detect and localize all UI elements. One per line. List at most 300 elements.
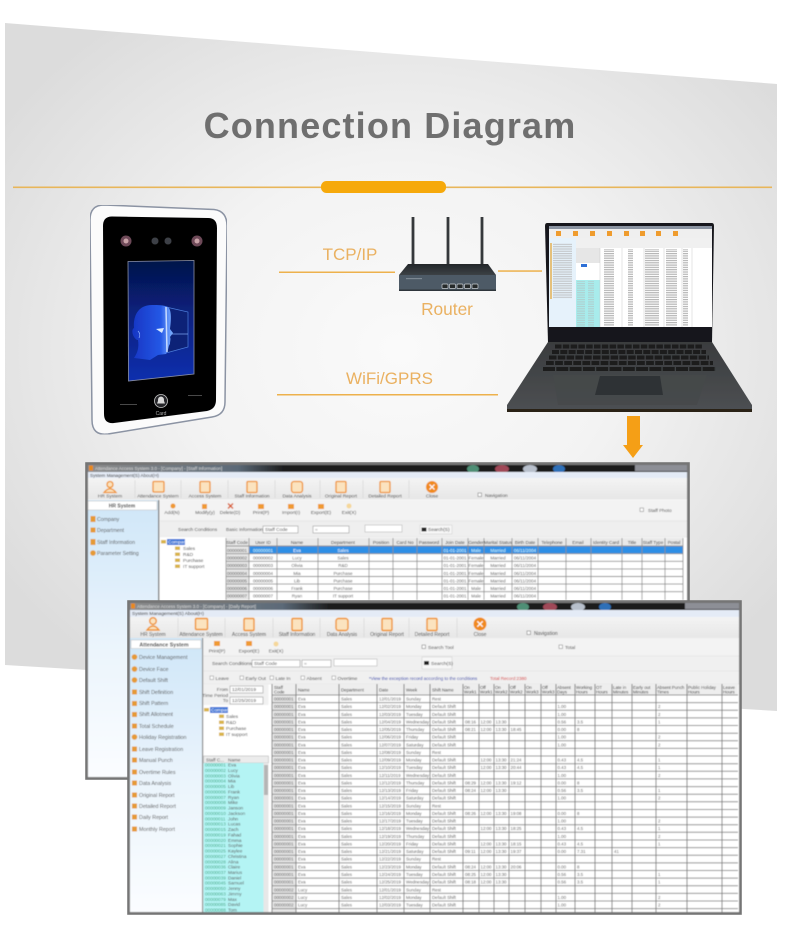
attendance table rows: 1	[658, 842, 661, 846]
attendance table rows: Sales	[341, 880, 353, 885]
attendance table rows: 0.43	[558, 765, 567, 770]
attendance table header: Code	[274, 690, 285, 694]
search conditions row: Search Conditions	[178, 527, 218, 533]
staff list: John	[228, 816, 239, 821]
attendance table rows: 0.00	[558, 849, 567, 854]
window menu bar	[130, 610, 739, 617]
attendance table rows: 8	[577, 864, 580, 869]
table rows: Eva	[293, 548, 301, 553]
attendance table rows: Sunday	[406, 750, 422, 755]
attendance table header: Days	[557, 690, 568, 694]
label: TCP/IP: TCP/IP	[323, 245, 377, 264]
attendance table rows: 00000002	[274, 887, 294, 892]
attendance table header: Leave	[723, 685, 736, 690]
staff list: 00000005	[205, 784, 226, 789]
table header: Card No	[396, 540, 414, 545]
attendance table header: Absent Punch	[657, 685, 685, 690]
sidebar: attendance system: Shift Allotment	[139, 712, 173, 718]
table rows: Ryan	[292, 594, 303, 599]
attendance table rows: Monday	[406, 895, 422, 900]
staff list: Ryan	[228, 795, 239, 800]
title divider	[13, 181, 772, 193]
attendance table rows: Eva	[298, 872, 306, 877]
attendance table rows: 13:30	[496, 826, 507, 831]
staff list: Eva	[228, 763, 236, 768]
sidebar: attendance system: Manual Punch	[139, 758, 173, 764]
attendance table header: Working	[576, 685, 593, 690]
attendance table rows: 1.00	[558, 796, 567, 801]
attendance table rows: Sales	[341, 780, 353, 785]
table header: Gender	[468, 540, 484, 545]
attendance table rows: 19:08	[510, 811, 522, 816]
secondary toolbar: Export(E)	[239, 648, 260, 654]
attendance table rows: Eva	[298, 742, 306, 747]
attendance table header: Off	[480, 685, 487, 690]
staff list: 00000050	[205, 886, 226, 891]
date range and tree: R&D	[226, 720, 237, 726]
staff list: 00000009	[205, 806, 226, 811]
department tree: Purchase	[183, 558, 204, 564]
sidebar: HR system: Staff Information	[97, 540, 135, 546]
main toolbar: Navigation	[485, 493, 508, 499]
attendance table rows: 00000001	[274, 773, 294, 778]
attendance table header: Staff	[274, 685, 284, 690]
staff list: David	[228, 902, 240, 907]
label: Router: Router	[421, 299, 473, 319]
sidebar: HR system: HR System	[109, 504, 136, 510]
attendance table rows: Sales	[341, 857, 353, 862]
call button: Card	[156, 411, 167, 417]
background panel	[5, 23, 777, 711]
attendance table rows: 0.00	[558, 780, 567, 785]
attendance table rows: 2	[658, 712, 661, 717]
attendance table header	[274, 685, 736, 694]
attendance table rows: 13:30	[496, 758, 507, 762]
secondary toolbar: Delete(D)	[220, 510, 241, 516]
attendance table rows: 12/25/2019	[379, 880, 402, 885]
attendance table rows: Default Shift	[432, 719, 457, 724]
search conditions row: Search(S)	[428, 527, 450, 533]
search conditions row	[212, 657, 453, 669]
staff list: Mia	[228, 779, 236, 784]
attendance table rows: 00000001	[274, 803, 294, 808]
call button	[120, 394, 202, 417]
attendance table rows: 3.5	[577, 872, 584, 877]
attendance table rows: 2	[658, 742, 661, 747]
attendance table rows: Sales	[341, 735, 353, 740]
attendance table rows: Eva	[298, 735, 306, 740]
attendance table header: Hours	[723, 690, 736, 694]
attendance table header: Off	[510, 685, 517, 690]
attendance table header: On	[464, 685, 470, 690]
table rows: 00000004	[253, 571, 274, 576]
attendance table rows: Monday	[406, 704, 422, 709]
table rows: 01-01-2001	[443, 571, 467, 576]
main toolbar: Detailed Report	[368, 494, 402, 500]
table rows: Frank	[291, 586, 303, 591]
attendance table rows: Wednesday	[406, 719, 430, 724]
date range and tree: Sales	[226, 714, 239, 720]
attendance table rows: Eva	[298, 826, 306, 831]
attendance table rows: 13:30	[496, 788, 507, 793]
connector: wireless link	[277, 394, 498, 396]
attendance table rows: 13:30	[496, 811, 507, 816]
staff list: 00000001	[205, 763, 226, 768]
table header: Birth Date	[515, 540, 536, 545]
attendance table rows: Sales	[341, 902, 353, 908]
window menu bar	[88, 472, 687, 478]
attendance table rows: Eva	[298, 849, 306, 854]
attendance table rows: 12:00	[480, 826, 492, 831]
table rows: 06/11/2004	[514, 563, 537, 568]
window menu bar: System Management(S) About(H)	[132, 611, 204, 617]
sidebar: attendance system: Monthly Report	[139, 827, 175, 833]
attendance table rows: 00000001	[274, 842, 294, 846]
attendance table rows: Default Shift	[432, 834, 457, 839]
staff list: Claire	[228, 865, 241, 870]
secondary toolbar: Exit(X)	[342, 510, 357, 516]
attendance table rows: Tuesday	[406, 712, 423, 717]
staff list: Staff C...	[206, 758, 224, 762]
window title bar	[130, 603, 739, 611]
attendance table rows: 12/10/2019	[379, 765, 402, 770]
main toolbar: Staff Information	[279, 632, 316, 638]
attendance table rows: Eva	[298, 796, 306, 801]
arrow: laptop to software	[623, 416, 643, 458]
attendance table rows: Sales	[341, 849, 353, 854]
table header: Email	[572, 540, 584, 545]
laptop touchpad	[595, 376, 663, 395]
attendance table header: Work2	[495, 690, 508, 694]
attendance table rows: 2	[658, 704, 661, 709]
attendance table rows: 0.56	[558, 880, 567, 885]
exception filter row: Late In	[276, 676, 291, 682]
attendance table rows: Monday	[406, 811, 422, 816]
attendance table rows: 1	[658, 826, 661, 831]
search conditions row: Staff Code	[265, 527, 288, 533]
attendance table rows: 1	[658, 719, 661, 724]
attendance table rows: Eva	[298, 834, 306, 839]
sidebar: attendance system: Shift Pattern	[139, 701, 168, 707]
attendance table rows: 00000001	[274, 758, 294, 762]
staff list: 00000079	[205, 897, 226, 902]
staff list: 00000010	[205, 811, 226, 816]
attendance table rows: Thursday	[406, 727, 425, 732]
attendance table rows: 12:00	[480, 788, 492, 793]
table header: Marital Status	[484, 540, 513, 545]
attendance table rows: 12/06/2019	[379, 735, 402, 740]
main toolbar: Navigation	[534, 631, 558, 637]
attendance table rows: 12/12/2019	[379, 780, 402, 785]
attendance table rows: 0.56	[558, 719, 567, 724]
staff list: Olivia	[228, 773, 240, 778]
attendance table rows: 13:30	[496, 864, 507, 869]
attendance table rows: Sales	[341, 826, 353, 831]
attendance table rows: 1.00	[558, 704, 567, 709]
attendance table header: Work1	[464, 690, 477, 694]
attendance table rows: 12/24/2019	[379, 872, 402, 877]
attendance table header: Work1	[480, 690, 493, 694]
attendance table rows: 0.00	[558, 727, 567, 732]
attendance table rows: Sales	[341, 803, 353, 808]
main toolbar	[88, 478, 687, 500]
attendance table rows: Saturday	[406, 796, 424, 801]
attendance table rows: Default Shift	[432, 788, 457, 793]
attendance table rows: 12/15/2019	[379, 803, 402, 808]
attendance table rows: 21:24	[510, 758, 522, 762]
search conditions row: =	[304, 662, 307, 667]
sidebar: attendance system: Default Shift	[139, 678, 168, 684]
attendance table rows: 12/05/2019	[379, 727, 402, 732]
attendance table rows: Sales	[341, 765, 353, 770]
main toolbar: Staff Information	[234, 494, 270, 500]
attendance table rows: 8	[577, 811, 580, 816]
attendance table rows: Sales	[341, 742, 353, 747]
attendance table rows: 09:11	[465, 849, 476, 854]
attendance table rows: 0.43	[558, 826, 567, 831]
department tree: Company	[168, 540, 189, 546]
sidebar: attendance system: Daily Report	[139, 815, 169, 821]
attendance table rows: 12/03/2019	[379, 902, 402, 908]
attendance table rows: 4.5	[577, 826, 584, 831]
attendance table rows: 08:24	[465, 864, 477, 869]
staff list: Lucas	[228, 822, 241, 827]
table rows: 01-01-2001	[443, 563, 467, 568]
attendance table rows: 2	[658, 819, 661, 824]
attendance table rows: 13:30	[496, 872, 507, 877]
attendance table rows: 12/11/2019	[379, 773, 401, 778]
date range and tree: From	[217, 687, 228, 693]
table rows: Mia	[293, 571, 301, 576]
table rows: Male	[471, 586, 481, 591]
attendance table rows: 12/03/2019	[379, 712, 402, 717]
staff list: 00000045	[205, 881, 226, 886]
table rows: 01-01-2001	[443, 556, 467, 561]
attendance table rows: Default Shift	[432, 880, 457, 885]
attendance table rows: 0.56	[558, 872, 567, 877]
attendance table rows: Sales	[341, 727, 353, 732]
staff list: Samuel	[228, 881, 244, 886]
table rows: 00000005	[253, 578, 274, 583]
attendance table rows: Sales	[341, 872, 353, 877]
attendance table header: Department	[341, 688, 365, 692]
attendance table header: Off	[542, 685, 549, 690]
table rows: 06/11/2004	[514, 594, 537, 599]
table rows: IT support	[333, 594, 354, 599]
staff list: Janson	[228, 806, 244, 811]
attendance table rows: 1.00	[558, 773, 567, 778]
table header: Telephone	[541, 540, 563, 545]
attendance table rows: Default Shift	[432, 780, 457, 785]
sidebar: attendance system: Leave Registration	[139, 747, 183, 753]
main toolbar: Attendance System	[137, 494, 179, 500]
sidebar: attendance system: Device Face	[139, 667, 168, 673]
table header: Password	[419, 540, 440, 545]
attendance table rows: 12:00	[480, 811, 492, 816]
attendance table rows: 12:00	[480, 872, 492, 877]
attendance table rows: 13:30	[496, 842, 507, 846]
main toolbar: Attendance System	[179, 632, 223, 638]
attendance table rows: Default Shift	[432, 872, 457, 877]
staff list: Frank	[228, 790, 241, 794]
attendance table rows: 2	[658, 796, 661, 801]
table header: Postal	[668, 540, 680, 545]
table header: User ID	[255, 540, 271, 545]
attendance table rows: Friday	[406, 788, 419, 793]
secondary toolbar: Total	[565, 645, 575, 651]
attendance table rows: 12:00	[480, 849, 492, 854]
sidebar: attendance system: Data Analysis	[139, 781, 171, 787]
search conditions row: Basic Information	[226, 527, 263, 533]
attendance table header: Minutes	[613, 690, 629, 694]
staff list: Christina	[228, 854, 247, 859]
department tree: IT support	[183, 564, 205, 570]
main toolbar: HR System	[98, 494, 122, 500]
attendance table header: Work3	[526, 690, 539, 694]
attendance table rows: 20:44	[510, 765, 522, 770]
attendance table rows: Rest	[432, 696, 442, 702]
attendance table rows: Sales	[341, 773, 353, 778]
main toolbar: HR System	[140, 632, 166, 638]
staff list: 00000088	[205, 908, 226, 913]
attendance table rows: Eva	[298, 811, 306, 816]
staff list: 00000013	[205, 822, 226, 827]
secondary toolbar: Modify(y)	[195, 510, 215, 516]
attendance table rows: Thursday	[406, 834, 425, 839]
attendance table rows: 12:00	[480, 780, 492, 785]
attendance table rows: Friday	[406, 842, 419, 846]
attendance table rows: 00000001	[274, 788, 294, 793]
laptop screen with software	[549, 226, 712, 327]
window title bar: Attendance Access System 3.0 - [Company] - [Staff Information]	[95, 466, 222, 471]
date range and tree: IT support	[226, 732, 248, 738]
laptop keyboard	[543, 346, 716, 369]
attendance table rows: Default Shift	[432, 895, 457, 900]
staff list: 00000027	[205, 854, 226, 859]
secondary toolbar: Add(N)	[164, 510, 180, 516]
staff list: 00000020	[205, 838, 226, 843]
table header: Position	[373, 540, 390, 545]
attendance table rows: Sales	[341, 788, 353, 793]
staff list: 00000006	[205, 790, 226, 794]
table rows: 00000003	[227, 563, 248, 568]
exception filter row: Total Record:2380	[490, 676, 527, 681]
table rows: 06/11/2004	[514, 548, 537, 553]
attendance table rows: 08:24	[465, 788, 477, 793]
attendance table rows: Eva	[298, 788, 306, 793]
staff list: Max	[228, 897, 238, 902]
attendance table rows: 12/01/2019	[379, 887, 402, 892]
attendance table rows: 00000001	[274, 712, 294, 717]
attendance table header: Date	[379, 688, 389, 692]
attendance table rows: Default Shift	[432, 712, 457, 717]
attendance table rows: Default Shift	[432, 773, 457, 778]
table rows: Married	[490, 578, 506, 583]
date range and tree: Company	[211, 708, 232, 714]
attendance table rows: 12/16/2019	[379, 811, 402, 816]
attendance table rows: Default Shift	[432, 735, 457, 740]
attendance table rows: 13:30	[496, 780, 507, 785]
attendance table rows: 08:16	[465, 719, 477, 724]
table rows: 00000006	[253, 586, 274, 591]
table rows: Sales	[337, 556, 349, 561]
table rows: 06/11/2004	[514, 578, 537, 583]
attendance table rows: Eva	[298, 842, 306, 846]
table header: Join Date	[445, 540, 465, 545]
attendance table rows: 12/20/2019	[379, 842, 402, 846]
secondary toolbar: Exit(X)	[269, 648, 284, 654]
attendance table header: Name	[298, 688, 310, 692]
staff list: 00000019	[205, 832, 226, 837]
staff list: 00000008	[205, 800, 226, 805]
attendance table rows: 12:00	[480, 880, 492, 885]
attendance table header: OT	[596, 685, 602, 690]
table rows: Female	[468, 563, 484, 568]
staff list: Jimmy	[228, 892, 242, 896]
attendance table rows: Rest	[432, 857, 442, 862]
attendance table rows: 2	[658, 895, 661, 900]
attendance table rows: Default Shift	[432, 849, 457, 854]
attendance table rows: Sales	[341, 895, 353, 900]
staff list: Jenny	[228, 886, 241, 891]
attendance table rows: Sales	[341, 819, 353, 824]
attendance table rows: Monday	[406, 864, 422, 869]
sidebar: attendance system: Detailed Report	[139, 804, 176, 810]
attendance table rows: 00000001	[274, 727, 294, 732]
attendance table rows: 00000001	[274, 742, 294, 747]
attendance table rows: 3.5	[577, 719, 584, 724]
attendance table rows: 12:00	[480, 758, 492, 762]
attendance table rows: 20:06	[510, 864, 522, 869]
table rows: 00000005	[227, 578, 248, 583]
table rows: Male	[471, 548, 481, 553]
department tree: Sales	[183, 546, 196, 552]
attendance table rows: 00000001	[274, 780, 294, 785]
window menu bar: System Management(S) About(H)	[90, 473, 159, 478]
attendance table header: On	[526, 685, 532, 690]
attendance table rows: Eva	[298, 765, 306, 770]
table header: Title	[628, 540, 637, 545]
attendance table rows: 1.00	[558, 819, 567, 824]
sidebar: attendance system: Overtime Rules	[139, 770, 176, 776]
attendance table rows: 1	[658, 758, 661, 762]
attendance table rows: Default Shift	[432, 842, 457, 846]
attendance table rows: Tuesday	[406, 765, 423, 770]
attendance table rows: 08:25	[465, 872, 477, 877]
attendance table header: Late in	[613, 685, 627, 690]
attendance table rows: Sunday	[406, 857, 422, 862]
attendance table rows: 00000001	[274, 880, 294, 885]
attendance table rows: Default Shift	[432, 727, 457, 732]
software window: HR system	[85, 462, 690, 780]
main toolbar: Access System	[189, 494, 221, 500]
attendance table rows: 2	[658, 834, 661, 839]
attendance table rows: Thursday	[406, 780, 425, 785]
attendance table rows: 00000001	[274, 750, 294, 755]
sidebar: HR system: Company	[97, 517, 120, 523]
icon: router	[399, 217, 496, 291]
attendance table rows: Sales	[341, 758, 353, 762]
attendance table rows: 7.31	[577, 849, 586, 854]
attendance table rows: 12/09/2019	[379, 758, 402, 762]
attendance table rows: 8	[577, 727, 580, 732]
window title bar	[88, 465, 687, 473]
sidebar: attendance system: Holiday Registration	[139, 735, 186, 741]
search conditions row: =	[315, 528, 318, 533]
attendance table rows: 00000001	[274, 719, 294, 724]
date range and tree: Time Period	[202, 693, 228, 699]
table rows: 00000002	[227, 556, 248, 561]
